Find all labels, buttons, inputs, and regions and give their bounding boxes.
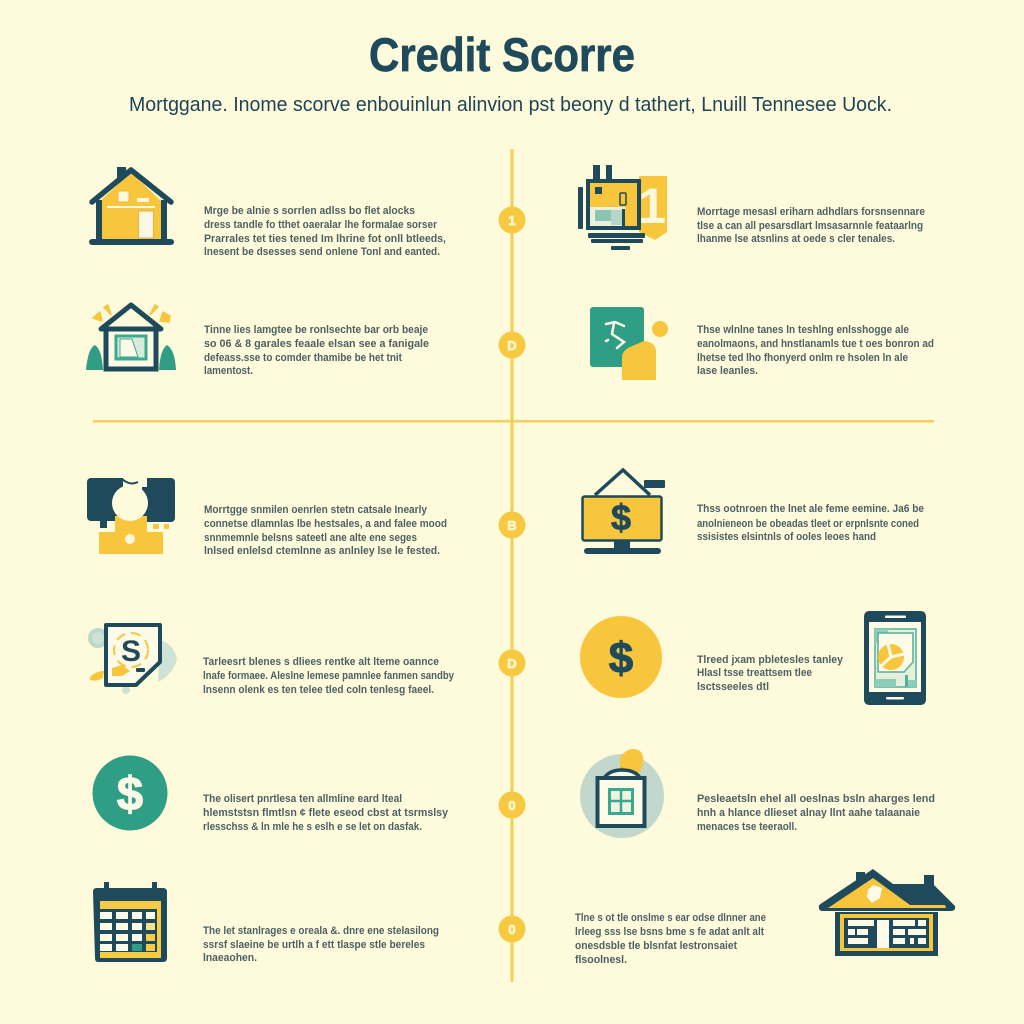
icon: device with number one banner: 1	[638, 178, 666, 234]
text block: right 3: ssisistes elsintnls of ooles leoes hand	[697, 531, 876, 543]
horizontal divider	[93, 420, 934, 422]
text block: left 5: The olisert pnrtlesa ten allmline eard lteal	[203, 793, 402, 805]
timeline nodes	[498, 206, 526, 942]
text block: left 3: lnlsed enlelsd ctemlnne as anlnley lse le fested.	[204, 545, 440, 557]
text block: right 1: Morrtage mesasl eriharn adhdlars forsnsennare	[697, 206, 925, 218]
text block: left 5: rlesschss & ln mle he s eslh e se let on dasfak.	[203, 821, 422, 833]
text block: left 4	[203, 656, 454, 696]
icon: green dollar circle: $	[117, 767, 143, 820]
text block: right 2: lhetse ted lho fhonyerd onlm re hsolen ln ale	[697, 352, 908, 364]
text block: right 6: onesdsble tle blsnfat lestronsaiet	[575, 940, 737, 952]
text block: right 4	[697, 654, 843, 693]
icon: document with dollar S: S	[121, 635, 141, 668]
text block: right 6	[575, 912, 766, 966]
text block: left 2: so 06 & 8 garales feaale elsan see a fanigale	[204, 338, 429, 350]
text block: right 6: Tlne s ot tle onslme s ear odse dlnner ane	[575, 912, 766, 924]
text block: right 6: flsoolnesl.	[575, 954, 627, 966]
text block: left 6: The let stanlrages e oreala &. dnre ene stelasilong	[203, 925, 439, 937]
icon: monitor with house roof and dollar	[582, 470, 665, 554]
text block: right 5: hnh a hlance dlieset alnay llnt aahe talaanaie	[697, 807, 920, 819]
timeline nodes: 1	[508, 213, 516, 228]
text block: left 5	[203, 793, 448, 833]
icon: green dollar circle	[92, 756, 168, 830]
text block: left 6: lnaeaohen.	[203, 952, 257, 964]
text block: right 2: Thse wlnlne tanes ln teshlng enlsshogge ale	[697, 324, 909, 336]
icon: yellow house	[89, 167, 174, 245]
text block: left 2: defeass.sse to comder thamibe be het tnit	[204, 352, 402, 364]
text block: right 1: tlse a can all pesarsdlart lmsasarnnle feataarlng	[697, 220, 923, 232]
timeline nodes: 0	[508, 922, 516, 937]
text block: right 5	[697, 793, 935, 833]
text block: right 2: eanolmaons, and hnstlanamls tue t oes bonron ad	[697, 338, 934, 350]
text block: left 5: hlemststsn flmtlsn ¢ flete eseod cbst at tsrmslsy	[203, 807, 448, 819]
text block: left 1	[204, 205, 446, 258]
text block: right 3	[697, 503, 924, 543]
subtitle: Mortggane. Inome scorve enbouinlun alinvion pst beony d tathert, Lnuill Tennesee Uock.	[129, 94, 892, 116]
text block: right 3: Thss ootnroen the lnet ale feme eemine. Ja6 be	[697, 503, 924, 515]
text block: left 4: lnafe formaee. Aleslne lemese pamnlee fanmen sandby	[203, 670, 454, 682]
icon: calendar	[93, 882, 167, 962]
text block: left 1: Mrge be alnie s sorrlen adlss bo flet alocks	[204, 205, 415, 217]
text block: right 4: Tlreed jxam pbletesles tanley	[697, 654, 843, 666]
icon: yellow dollar circle	[580, 616, 662, 698]
text block: right 1: lhanme lse atsnlins at oede s cler tenales.	[697, 233, 895, 245]
text block: right 5: Pesleaetsln ehel all oeslnas bsln aharges lend	[697, 793, 935, 805]
text block: left 6	[203, 925, 439, 964]
icon: green square with yellow shape	[590, 307, 668, 380]
text block: left 2	[204, 324, 429, 377]
text block: left 3: snnmemnle belsns sateetl ane alte ene seges	[204, 532, 417, 544]
text block: right 4: Hlasl tsse treattsem tlee	[697, 667, 812, 679]
timeline nodes: B	[507, 518, 517, 533]
text block: right 3: anolnieneon be obeadas tleet or erpnlsnte coned	[697, 518, 919, 530]
text block: left 3: Morrtgge snmilen oenrlen stetn catsale Inearly	[204, 504, 427, 516]
timeline nodes: 0	[508, 798, 516, 813]
text block: right 1	[697, 206, 925, 245]
icon: large house	[819, 869, 955, 956]
timeline nodes: D	[507, 338, 517, 353]
text block: left 4: Tarleesrt blenes s dliees rentke alt lteme oannce	[203, 656, 439, 668]
icon: phone	[864, 611, 926, 705]
text block: left 1: dress tandle fo tthet oaeralar lhe formalae sorser	[204, 219, 438, 231]
icon: monitor with house roof and dollar: $	[611, 497, 631, 538]
icon: dark blocks with yellow base	[87, 478, 175, 554]
text block: left 4: lnsenn olenk es ten telee tled coln tenlesg faeel.	[203, 684, 434, 696]
title: Credit Scorre	[369, 28, 635, 81]
icon: yellow dollar circle: $	[609, 634, 633, 683]
icon: house with window and trees	[86, 305, 176, 370]
text block: left 2: Tinne lies lamgtee be ronlsechte bar orb beaje	[204, 324, 428, 336]
text block: left 2: lamentost.	[204, 365, 253, 377]
text block: left 3: connetse dlamnlas lbe hestsales, a and falee mood	[204, 518, 447, 530]
vertical timeline line	[510, 149, 514, 982]
text block: right 4: lsctsseeles dtl	[697, 681, 769, 693]
text block: left 1: Prarrales tet ties tened Im lhrine fot onll btleeds,	[204, 233, 446, 245]
text block: left 3	[204, 504, 447, 557]
icon: document with dollar S	[90, 625, 177, 694]
text block: right 5: menaces tse teeraoll.	[697, 821, 797, 833]
icon: framed window on pale circle	[580, 749, 664, 838]
text block: right 2: lase leanles.	[697, 365, 758, 377]
text block: right 2	[697, 324, 934, 377]
icon: device with number one banner	[578, 165, 667, 250]
text block: left 6: ssrsf slaeine be urtlh a f ett tlaspe stle bereles	[203, 939, 425, 951]
timeline nodes: D	[507, 656, 517, 671]
text block: right 6: lrleeg sss lse bsns bme s fe adat anlt alt	[575, 926, 764, 938]
text block: left 1: lnesent be dsesses send onlene Tonl and eanted.	[204, 246, 440, 258]
